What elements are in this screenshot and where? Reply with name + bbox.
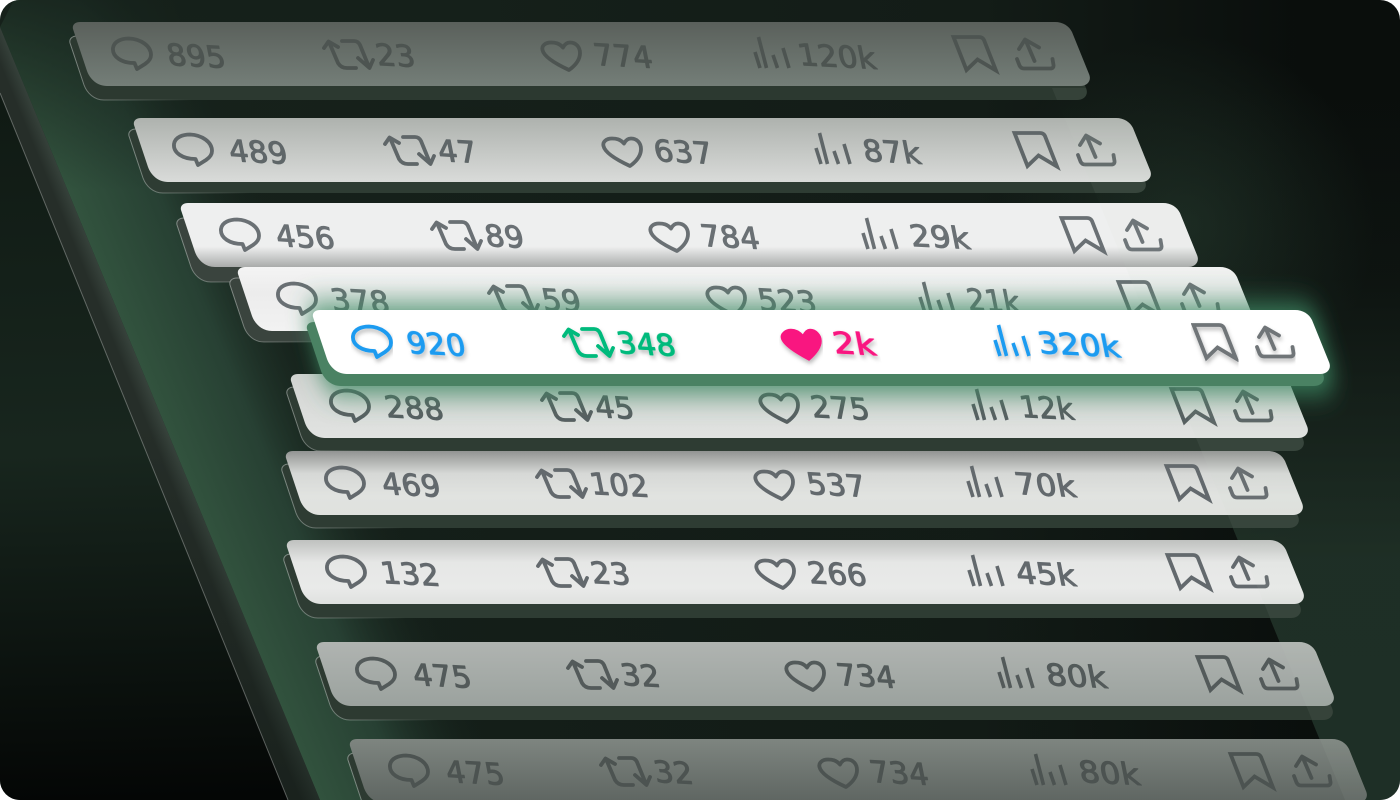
count: reposts: 45	[592, 390, 638, 427]
bar 9	[316, 642, 1334, 720]
icon: comment	[113, 38, 151, 69]
count: views: 45k	[1013, 556, 1079, 594]
count: reposts: 89	[482, 219, 528, 256]
icon: bookmark	[1172, 389, 1214, 422]
count: comments: 288	[382, 390, 447, 428]
count: reposts: 23	[588, 556, 634, 593]
bar 2	[129, 118, 1151, 193]
icon: bookmark	[1166, 466, 1209, 500]
count: comments: 456	[273, 219, 338, 257]
icon: bookmark	[1168, 555, 1210, 588]
icon: repost	[324, 41, 373, 68]
highlighted bar	[307, 310, 1330, 386]
icon: views	[969, 555, 1003, 586]
icon: bookmark	[1230, 754, 1273, 788]
icon: views	[973, 389, 1007, 420]
icon: views	[755, 37, 789, 68]
count: views: 87k	[860, 134, 924, 172]
count: likes: 774	[591, 38, 656, 76]
icon: share	[1235, 392, 1272, 420]
icon: share	[1261, 660, 1298, 688]
count: reposts: 32	[651, 755, 697, 792]
icon: repost	[568, 661, 617, 688]
icon: comment	[174, 134, 212, 165]
icon: heart	[755, 472, 793, 499]
icon: comment	[327, 556, 365, 587]
count: views: 80k	[1076, 755, 1143, 793]
icon: repost	[385, 137, 434, 164]
icon: comment	[390, 756, 428, 786]
icon: comment	[278, 284, 316, 314]
icon: heart	[819, 760, 857, 787]
icon: bookmark	[954, 37, 996, 70]
bar 1	[70, 22, 1090, 100]
icon: share	[1230, 468, 1267, 498]
icon: heart	[650, 224, 688, 251]
icon: heart	[760, 394, 798, 422]
icon: views	[863, 218, 897, 249]
count: likes: 784	[698, 219, 763, 257]
count: likes: 2k	[830, 326, 879, 363]
icon: heart	[707, 288, 745, 315]
icon: comment	[357, 658, 395, 689]
bar 4	[230, 267, 1255, 342]
count: comments: 895	[164, 38, 229, 76]
count: views: 120k	[795, 38, 880, 77]
count: views: 12k	[1017, 390, 1077, 428]
count: likes: 523	[755, 283, 820, 321]
icon: bookmark	[1194, 325, 1236, 358]
icon: heart	[542, 42, 580, 70]
icon: share	[1182, 284, 1219, 314]
icon: repost	[537, 470, 586, 497]
count: comments: 132	[378, 556, 443, 594]
icon: bookmark	[1198, 657, 1240, 690]
count: reposts: 348	[614, 326, 679, 364]
icon: share	[1017, 40, 1054, 68]
icon: bookmark	[1062, 218, 1104, 252]
bar 6	[287, 374, 1308, 451]
count: comments: 469	[379, 467, 444, 505]
count: views: 320k	[1035, 326, 1124, 365]
count: likes: 537	[804, 467, 869, 505]
icon: share	[1125, 220, 1162, 250]
icon: heart	[781, 330, 821, 360]
icon: comment	[353, 326, 391, 357]
icon: bookmark	[1014, 133, 1057, 166]
count: comments: 489	[226, 134, 291, 172]
count: views: 29k	[907, 219, 973, 257]
icon: comment	[221, 220, 259, 250]
count: reposts: 23	[373, 38, 419, 75]
icon: comment	[326, 468, 364, 498]
panel: left green slab	[0, 0, 438, 800]
icon: views	[999, 657, 1033, 688]
icon: bookmark	[1118, 282, 1161, 316]
icon: repost	[564, 329, 613, 356]
icon: views	[920, 282, 954, 313]
count: reposts: 59	[539, 283, 585, 320]
icon: views	[1032, 754, 1066, 785]
count: reposts: 32	[618, 658, 664, 695]
icon: share	[1231, 558, 1268, 586]
count: views: 80k	[1043, 658, 1110, 696]
right translucent veil over bars	[1052, 88, 1400, 800]
bar 3	[177, 203, 1198, 282]
count: comments: 475	[410, 658, 475, 696]
icon: share	[1257, 328, 1294, 356]
bar 10	[348, 739, 1367, 800]
icon: views	[968, 466, 1002, 497]
count: likes: 734	[867, 755, 932, 793]
icon: repost	[538, 559, 587, 586]
count: likes: 637	[651, 134, 716, 172]
icon: repost	[601, 758, 650, 785]
icon: heart	[786, 662, 824, 690]
icon: repost	[432, 222, 481, 249]
count: likes: 734	[834, 658, 899, 696]
icon: share	[1078, 136, 1115, 164]
count: comments: 378	[328, 283, 393, 321]
count: reposts: 102	[587, 467, 652, 505]
icon: repost	[542, 393, 591, 420]
icon: views	[816, 133, 850, 164]
bar 7	[282, 451, 1303, 528]
count: likes: 266	[805, 556, 870, 594]
icon: comment	[331, 390, 369, 421]
icon: repost	[489, 286, 538, 313]
count: views: 21k	[964, 283, 1023, 321]
icon: views	[995, 325, 1029, 356]
count: comments: 920	[404, 326, 469, 364]
count: comments: 475	[443, 755, 508, 793]
bar 8	[284, 540, 1304, 618]
count: likes: 275	[808, 390, 873, 428]
highlighted bar glow	[307, 304, 1334, 394]
icon: share	[1294, 756, 1331, 786]
count: views: 70k	[1012, 467, 1079, 505]
count: reposts: 47	[435, 134, 481, 171]
icon: heart	[603, 138, 641, 166]
icon: heart	[756, 560, 794, 588]
